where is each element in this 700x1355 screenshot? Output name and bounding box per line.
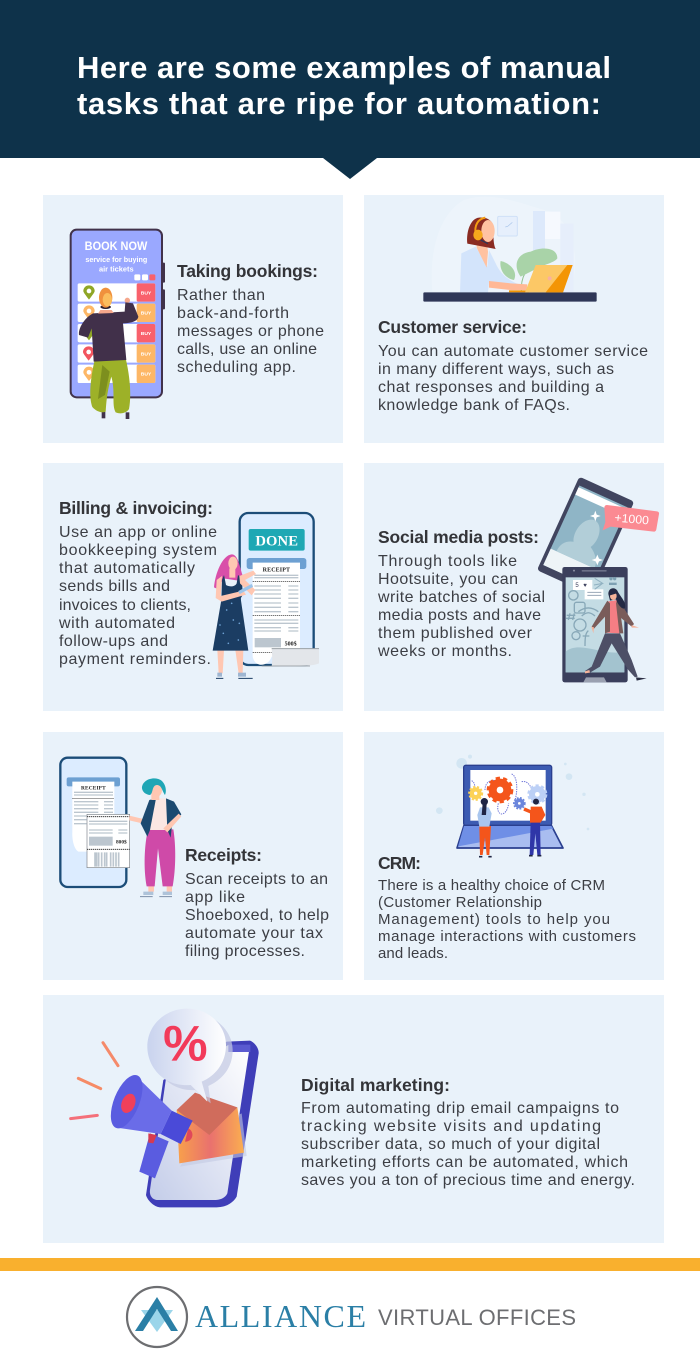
text: receipts: filing processes.	[185, 943, 305, 960]
text: customer service: in many different ways, such as	[378, 361, 614, 378]
illustration: phone, receipts and woman: 800$	[116, 838, 127, 845]
title	[77, 50, 611, 121]
panel: receipts	[43, 732, 343, 980]
text: digital marketing	[301, 1100, 635, 1189]
heading: receipts: Receipts:	[185, 845, 262, 865]
text: social media posts: media posts and have	[378, 607, 541, 624]
text: receipts: Shoeboxed, to help	[185, 907, 329, 924]
illustration: booking phone and person: service for buying	[85, 257, 147, 264]
illustration: phone receipt and woman: DONE	[255, 533, 298, 549]
text: social media posts: weeks or months.	[377, 643, 512, 660]
panel: CRM	[364, 732, 664, 980]
title: Here are some examples of manual	[77, 50, 611, 85]
text: receipts	[185, 871, 329, 960]
panel: social media posts	[364, 463, 664, 711]
text: receipts: Scan receipts to an	[185, 871, 328, 888]
text: social media posts: write batches of social	[377, 589, 545, 606]
illustration: phone receipt and woman	[213, 513, 319, 678]
heading: customer service: Customer service:	[378, 317, 527, 337]
illustration: booking phone and person: BUY	[141, 290, 152, 296]
callout: +1000: +1000	[614, 511, 650, 528]
text: CRM	[378, 877, 636, 962]
tagline: VIRTUAL OFFICES	[378, 1305, 576, 1330]
wordmark: ALLIANCE	[195, 1298, 366, 1334]
footer accent bar	[0, 1258, 700, 1271]
illustration: megaphone, phone, envelope and percent bubble	[71, 1009, 259, 1207]
panel: customer service	[364, 195, 664, 443]
text: CRM: (Customer Relationship	[378, 894, 542, 911]
illustration: social phones and walking woman: ♥	[583, 583, 587, 589]
text: billing and invoicing	[58, 524, 217, 668]
text: social media posts: them published over	[378, 625, 533, 642]
text: taking bookings: back-and-forth	[177, 305, 289, 322]
text: digital marketing: marketing efforts can be automated, which	[301, 1154, 628, 1171]
text: customer service: You can automate customer service	[378, 343, 648, 360]
text: customer service	[378, 343, 648, 414]
callout: +1000	[603, 505, 659, 532]
text: receipts: app like	[185, 889, 245, 906]
rays	[71, 1043, 118, 1119]
text: digital marketing: From automating drip email campaigns to	[301, 1100, 619, 1117]
text: CRM: and leads.	[378, 945, 448, 962]
text: taking bookings: scheduling app.	[177, 359, 296, 376]
title: tasks that are ripe for automation:	[77, 86, 601, 121]
illustration: booking phone and person: BUY	[141, 372, 152, 378]
text: social media posts: Hootsuite, you can	[378, 571, 518, 588]
text: taking bookings: calls, use an online	[177, 341, 317, 358]
heading: CRM: CRM:	[378, 853, 421, 873]
text: billing and invoicing: Use an app or online	[59, 524, 217, 541]
logo mark	[127, 1287, 187, 1347]
text: billing and invoicing: bookkeeping system	[59, 542, 217, 559]
illustration: booking phone and person: BUY	[141, 331, 152, 337]
text: social media posts: Through tools like	[378, 553, 517, 570]
text: billing and invoicing: follow-ups and	[59, 633, 168, 650]
text: digital marketing: saves you a ton of precious time and energy.	[301, 1172, 635, 1189]
illustration: booking phone and person: air tickets	[99, 266, 134, 273]
text: customer service: knowledge bank of FAQs.	[378, 397, 570, 414]
illustration: laptop with gears and two people	[436, 755, 589, 857]
heading: social media posts: Social media posts:	[378, 527, 539, 547]
panel: billing and invoicing	[43, 463, 343, 711]
logo: Alliance Virtual Offices	[127, 1287, 576, 1347]
text: billing and invoicing: payment reminders.	[59, 651, 211, 668]
heading: taking bookings: Taking bookings:	[177, 261, 318, 281]
heading: digital marketing: Digital marketing:	[301, 1075, 450, 1095]
person right	[523, 799, 545, 856]
text: taking bookings	[177, 287, 324, 376]
illustration: social phones and walking woman	[537, 477, 659, 682]
envelope	[177, 1093, 247, 1167]
text: CRM: manage interactions with customers	[378, 928, 636, 945]
panel: digital marketing	[43, 995, 664, 1243]
header banner	[0, 0, 700, 179]
illustration: phone, receipts and woman	[60, 758, 181, 897]
text: digital marketing: tracking website visits and updating	[301, 1118, 601, 1135]
text: billing and invoicing: that automatically	[59, 560, 195, 577]
text: billing and invoicing: sends bills and	[59, 578, 170, 595]
megaphone	[104, 1071, 193, 1178]
heading: billing and invoicing: Billing & invoicing:	[59, 498, 213, 518]
text: taking bookings: messages or phone	[177, 323, 324, 340]
panel: taking bookings	[43, 195, 343, 443]
text: digital marketing: subscriber data, so much of your digital	[301, 1136, 600, 1153]
illustration: booking phone and person: BOOK NOW	[85, 239, 148, 253]
text: customer service: chat responses and building a	[378, 379, 604, 396]
illustration: booking phone and person: BUY	[141, 311, 152, 317]
speech bubble: %	[163, 1016, 208, 1072]
text: CRM: There is a healthy choice of CRM	[378, 877, 605, 894]
person left	[477, 798, 492, 857]
speech bubble	[147, 1009, 233, 1103]
illustration: customer service agent at desk	[423, 197, 597, 302]
illustration: phone receipt and woman: 500$	[285, 640, 297, 647]
text: billing and invoicing: with automated	[58, 615, 175, 632]
text: billing and invoicing: invoices to clients,	[59, 597, 191, 614]
illustration: booking phone and person	[71, 230, 165, 419]
illustration: booking phone and person: BUY	[141, 351, 152, 357]
text: taking bookings: Rather than	[177, 287, 265, 304]
illustration: phone, receipts and woman: RECEIPT	[81, 786, 106, 792]
text: CRM: Management) tools to help you	[378, 911, 610, 928]
text: social media posts	[377, 553, 545, 660]
illustration: social phones and walking woman: 5	[575, 583, 579, 589]
illustration: phone receipt and woman: RECEIPT	[263, 568, 290, 574]
text: receipts: automate your tax	[185, 925, 323, 942]
